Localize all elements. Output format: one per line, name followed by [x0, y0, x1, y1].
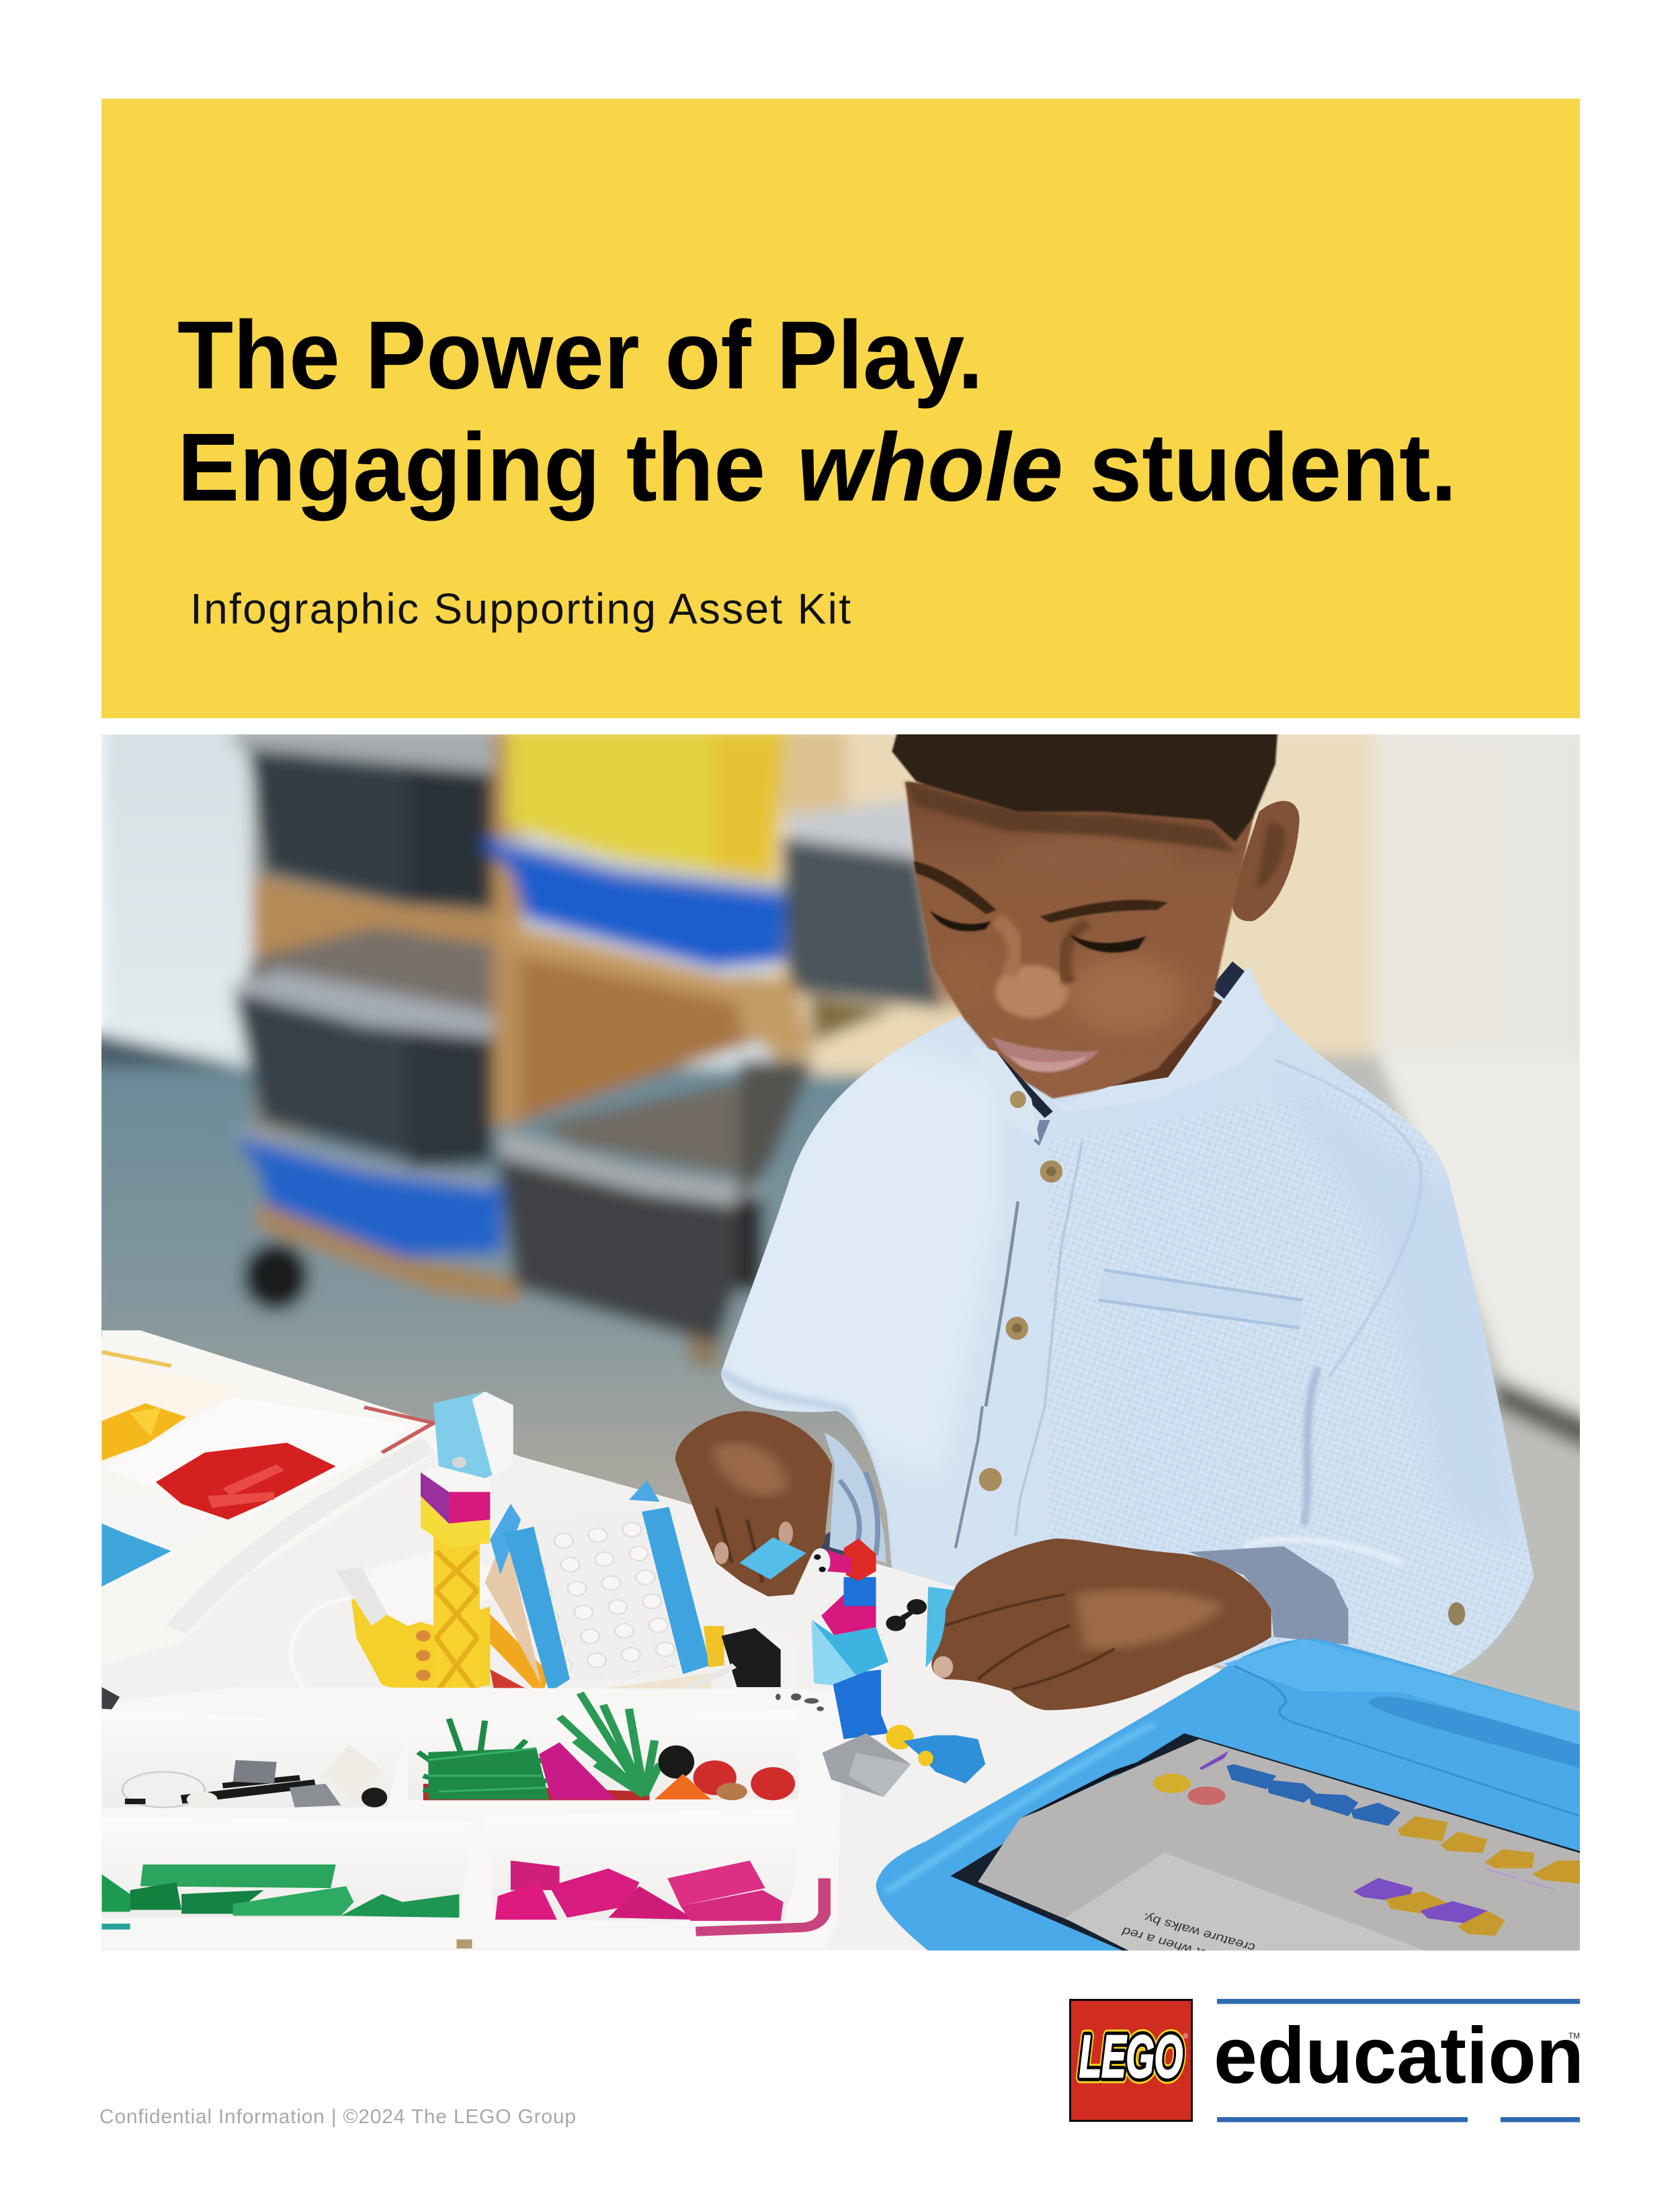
- logo: LEGO: ®: [1183, 2032, 1188, 2041]
- mouth: [991, 1037, 1099, 1072]
- on-screen instruction text: [1120, 1910, 1257, 1970]
- face: [905, 781, 1254, 1099]
- collar: [1056, 966, 1275, 1111]
- loose brick under hand: [926, 1587, 958, 1668]
- logo: LEGO: LEGO: [1079, 2023, 1183, 2090]
- cuff: [1189, 1546, 1348, 1645]
- panel: yellow title banner: [101, 99, 1580, 718]
- photo background: classroom shelves and storage bins: [101, 734, 1580, 1712]
- left sleeve fold: [719, 1371, 887, 1559]
- right hand: [931, 1539, 1271, 1710]
- eyes: [929, 910, 991, 931]
- shirt pocket: [1099, 1270, 1302, 1328]
- on-screen instruction text: to react when a red: [1120, 1924, 1245, 1970]
- shirt fabric weave on right side: [1048, 1085, 1534, 1674]
- lower sorting tray: [101, 1687, 843, 1948]
- logo: LEGO: LEGO: [1079, 2023, 1183, 2090]
- logo: education wordmark: TM: [1568, 2031, 1580, 2041]
- on-screen coding blocks: [1153, 1751, 1581, 1936]
- trays, LEGO model and building pieces: [101, 1330, 886, 1948]
- tablet screen: [951, 1733, 1611, 1969]
- black sensor: [704, 1626, 724, 1668]
- ear: [1232, 801, 1300, 921]
- shirt left-side highlight: [712, 1041, 1001, 1478]
- footer: confidentiality note: Confidential Information | ©2024 The LEGO Group: [99, 2106, 576, 2128]
- white studded tent: [505, 1504, 706, 1687]
- table: [101, 1337, 1411, 1951]
- heading: title: Engaging the: [177, 413, 765, 521]
- motor head on tower: [433, 1391, 513, 1478]
- small brick figure and minifigure: [810, 1539, 985, 1797]
- yellow tower: [433, 1523, 480, 1697]
- subtitle: Infographic Supporting Asset Kit: [190, 585, 851, 633]
- shirt sleeve shadow: [1297, 1096, 1520, 1540]
- buttons: [1010, 1091, 1026, 1108]
- yellow baseplate structure: [362, 1645, 711, 1695]
- heading: title: whole: [797, 413, 1063, 521]
- blue brick in hand: [739, 1537, 806, 1580]
- hair: [905, 781, 1235, 852]
- logo: LEGO: LEGO: [1079, 2023, 1183, 2090]
- sleeve seam: [1275, 1060, 1421, 1377]
- photo: boy building with LEGO bricks: [87, 726, 1613, 1970]
- right sleeve crease: [1304, 1367, 1318, 1525]
- left cuff folds: [825, 1433, 886, 1563]
- tablet in blue protective case: [876, 1639, 1611, 1970]
- orange side brick: [490, 1614, 549, 1697]
- left hand: [675, 1411, 832, 1596]
- eyebrows: [913, 861, 997, 914]
- boy: shirt: [720, 978, 1534, 1675]
- heading: title: student.: [1089, 413, 1457, 521]
- cuff button: [1448, 1602, 1465, 1625]
- heading: title: [177, 301, 1457, 521]
- heading: title: The Power of Play.: [177, 301, 983, 409]
- boy: arms, hands and lower shirt detail: [806, 1367, 1465, 1710]
- black peg: [886, 1599, 927, 1631]
- on-screen instruction text: creature walks by.: [1140, 1910, 1257, 1954]
- shirt placket: [986, 1201, 1018, 1406]
- lower shirt button: [979, 1468, 1002, 1491]
- logo: LEGO: [1070, 2000, 1192, 2120]
- neck: [1103, 996, 1222, 1088]
- logo: education wordmark: education: [1214, 2011, 1584, 2100]
- white connector wire: [291, 1598, 356, 1695]
- top-left sorting tray: [101, 1330, 449, 1666]
- boy: shirt details, head and face: [892, 726, 1421, 1406]
